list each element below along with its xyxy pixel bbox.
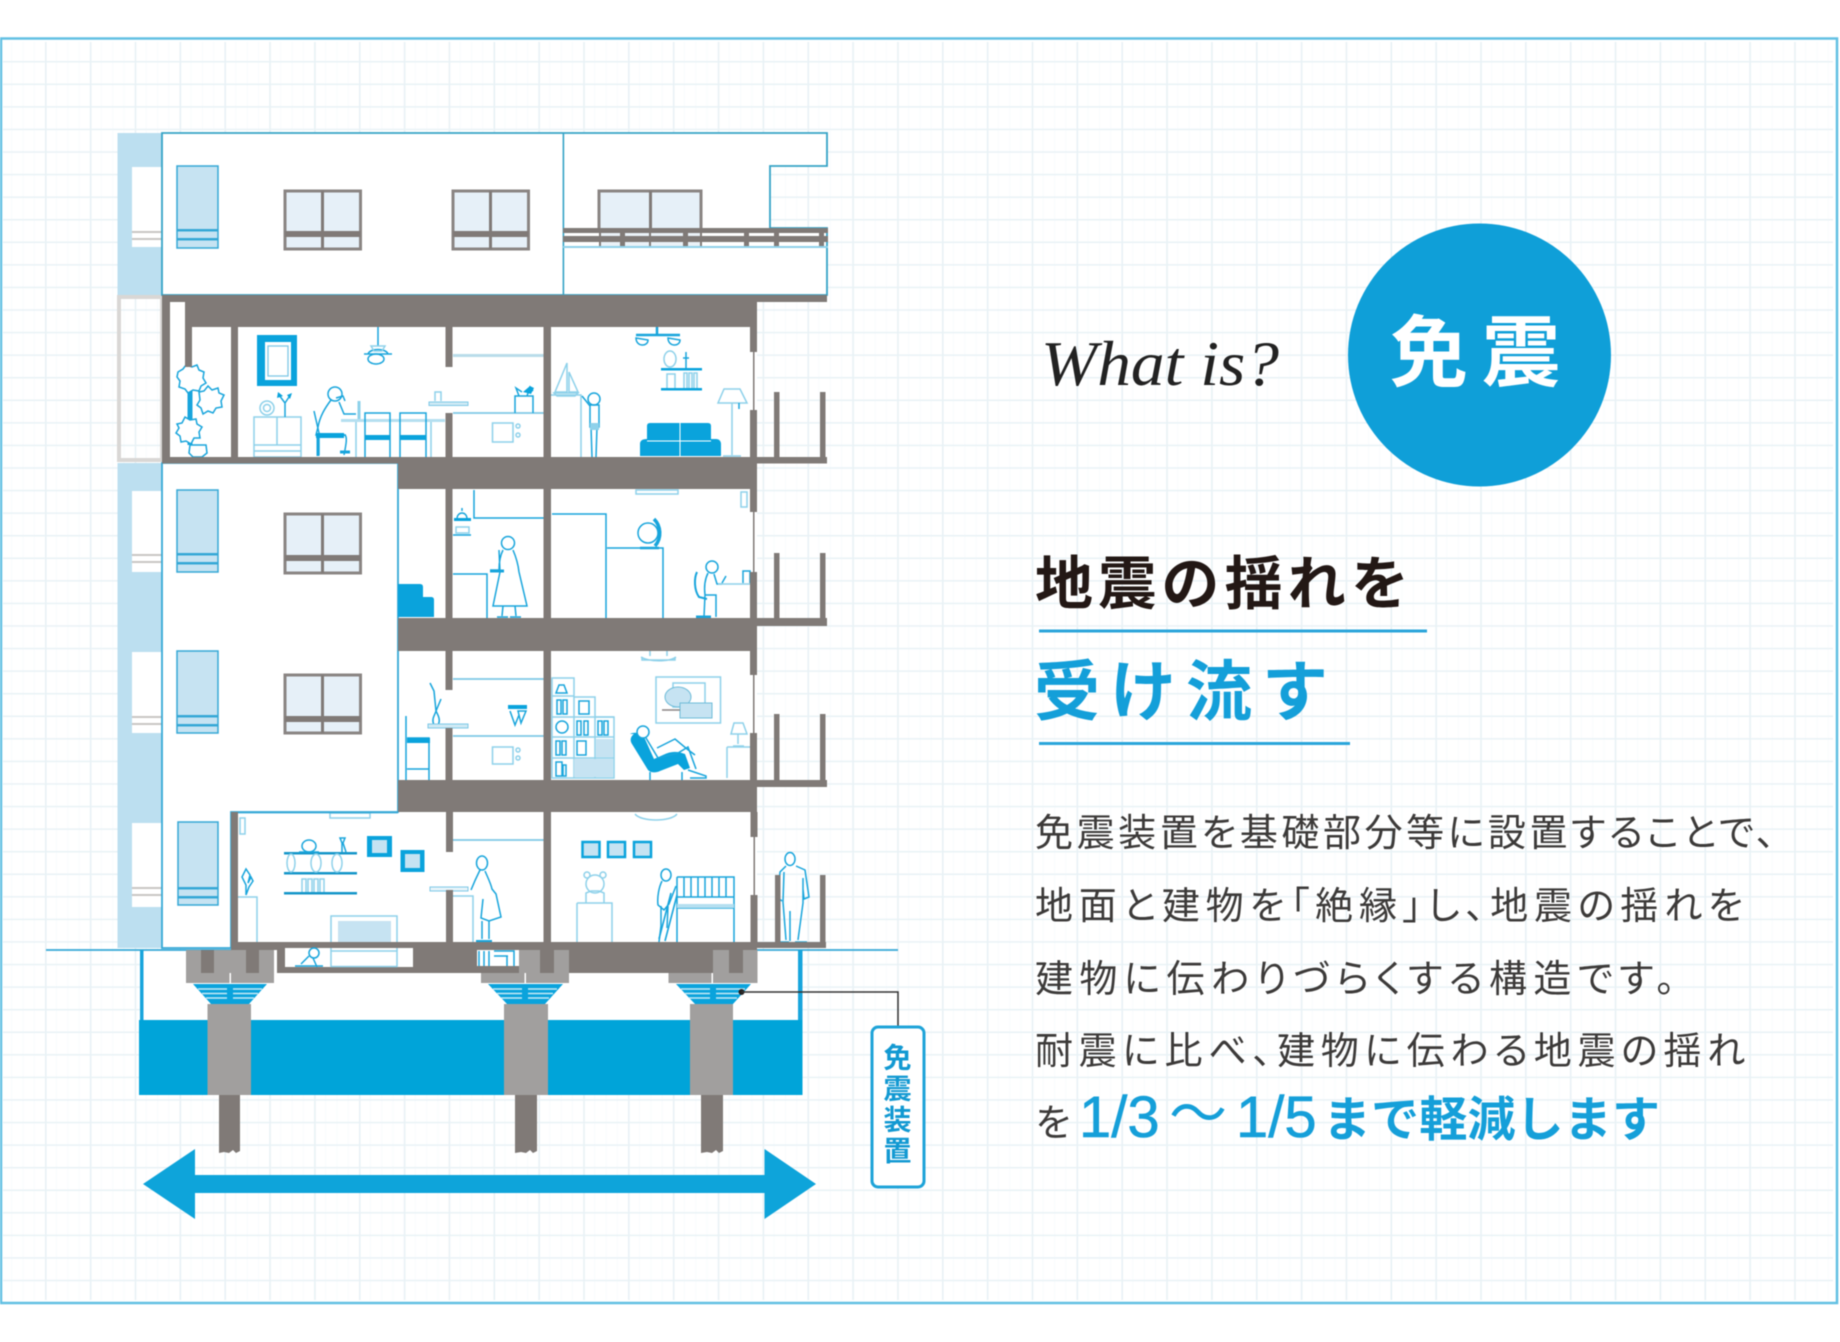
body text [1035, 813, 1775, 1145]
seated person at table [314, 387, 359, 456]
callout: isolation device label: 免震装置 [880, 1043, 912, 1167]
ground floor furniture [238, 813, 809, 966]
sofa end [398, 584, 434, 617]
chair and vase [406, 683, 468, 780]
bunk bed [677, 877, 734, 942]
circle badge: 免震: 免震 [1390, 309, 1560, 397]
highlighted reduction text [1079, 1082, 1660, 1150]
building cross-section illustration [46, 133, 924, 1219]
floor slab over pit with crawling child [277, 948, 757, 973]
structural slabs, beams and walls [162, 295, 827, 973]
sideboard with clock and flower [254, 392, 301, 457]
pedestal and small plant [238, 869, 257, 942]
reclining person [630, 726, 706, 780]
heading: What is?: What is? [1041, 328, 1279, 399]
headline: 受け流す: 受け流す [1034, 655, 1328, 729]
highlighted reduction text: まで軽減します [1323, 1094, 1660, 1147]
storage under floor [477, 950, 519, 966]
blue sofa [640, 423, 721, 456]
body text: 建物に伝わりづらくする構造です。 [1035, 959, 1675, 1001]
console unit [331, 916, 397, 966]
circle badge: 免震 [1348, 224, 1611, 486]
bear on pedestal [577, 872, 612, 942]
stepped bookcase [552, 678, 614, 778]
side elevation strip [118, 133, 162, 948]
second floor furniture [406, 651, 751, 780]
seismic isolator column centre [481, 950, 569, 1153]
headline: 地震の揺れを: 地震の揺れを [1035, 552, 1409, 617]
top floor exterior wall [162, 133, 828, 295]
middle floors exterior wall [162, 463, 398, 948]
framed pictures [367, 836, 424, 872]
room interiors background [170, 302, 757, 967]
pendant light [364, 327, 392, 364]
top room furniture [176, 327, 747, 457]
highlighted reduction text: 1/3 [1079, 1085, 1160, 1150]
ceiling fixture [641, 651, 676, 661]
table lamp [727, 723, 751, 778]
ceiling lamp [636, 327, 680, 345]
woman at kitchen [430, 840, 544, 942]
seismic isolator column right [668, 950, 758, 1153]
man on balcony [777, 852, 809, 942]
callout leader line [738, 989, 898, 1027]
person at desk [636, 490, 750, 617]
wall shelves [661, 351, 702, 390]
third floor furniture [398, 490, 750, 618]
three small frames [582, 842, 651, 857]
callout: isolation device label [872, 1027, 924, 1187]
double-headed arrow: ground motion [143, 1149, 816, 1219]
highlighted reduction text: 1/5 [1236, 1085, 1317, 1150]
plant [176, 365, 224, 457]
kitchen cabinets and woman cooking [453, 490, 544, 618]
picture frame [257, 335, 297, 386]
seismic isolator column left [186, 950, 274, 1153]
tall cabinets with globe [552, 514, 663, 618]
kitchen range [453, 679, 544, 764]
dining table and chairs [341, 413, 445, 457]
kitchen counter and oven [429, 356, 544, 442]
child reaching to sailboat on cabinet [551, 363, 600, 457]
shelves with vases [284, 838, 357, 894]
body text: 地面と建物を「絶縁」し、地震の揺れを [1035, 886, 1743, 928]
highlighted reduction text: ～ [1169, 1082, 1227, 1147]
floor lamp [718, 389, 747, 456]
woman with ladder [658, 869, 677, 942]
body text: 免震装置を基礎部分等に設置することで、 [1035, 813, 1775, 855]
wall picture [656, 677, 720, 723]
ceiling vents [240, 813, 677, 834]
foundation pit and ground [46, 950, 898, 1095]
body text: を [1035, 1103, 1073, 1145]
body text: 耐震に比べ、建物に伝わる地震の揺れ [1035, 1031, 1745, 1073]
